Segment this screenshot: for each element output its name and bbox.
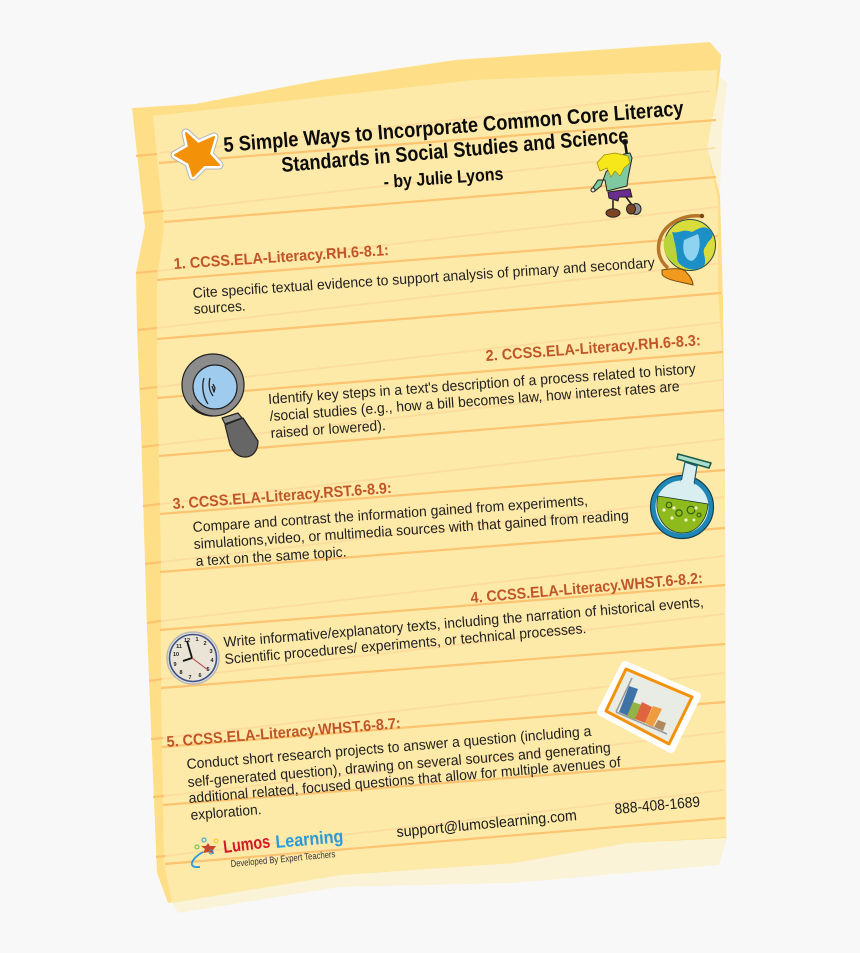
section 3: [172, 480, 629, 570]
logo: Lumos Learning: Learning: [275, 826, 344, 852]
section 5: [166, 715, 622, 824]
section 2: 2. CCSS.ELA-Literacy.RH.6-8.3:: [485, 332, 701, 365]
title: Standards in Social Studies and Science: [280, 124, 629, 177]
icon: magnifying glass: [182, 354, 258, 457]
title: [223, 97, 685, 192]
section 1: [173, 242, 656, 318]
section 4: [223, 570, 704, 668]
icon: flask: [650, 454, 714, 538]
paper: pale under sheet: [165, 73, 727, 913]
icon: wall clock: 12: [184, 638, 190, 644]
section 5: 5. CCSS.ELA-Literacy.WHST.6-8.7:: [166, 715, 401, 751]
title: 5 Simple Ways to Incorporate Common Core Literacy: [223, 97, 685, 157]
icon: wall clock: 2: [203, 641, 207, 647]
icon: wall clock: 9: [173, 662, 177, 668]
section 2: /social studies (e.g., how a bill becomes law, how interest rates are: [269, 379, 680, 425]
section 2: Identify key steps in a text's description of a process related to history: [268, 361, 697, 408]
section 5: exploration.: [190, 802, 262, 824]
logo: Lumos Learning: [192, 826, 344, 870]
section 1: sources.: [193, 299, 246, 318]
icon: globe: [658, 214, 716, 285]
icon: orange star: [175, 133, 219, 176]
paper: back sheet: [132, 42, 726, 903]
section 4: Write informative/explanatory texts, including the narration of historical events,: [223, 595, 704, 651]
icon: wall clock: 7: [188, 675, 192, 681]
logo: Lumos Learning: Developed By Expert Teachers: [230, 849, 336, 870]
section 3: a text on the same topic.: [195, 545, 347, 570]
icon: climbing kid: [591, 140, 641, 217]
chart bars: [616, 678, 667, 734]
icon: wall clock: 10: [173, 652, 179, 658]
section 5: self-generated question), drawing on several sources and generating: [187, 740, 611, 791]
icon: wall clock: 3: [209, 649, 213, 655]
section 3: simulations,video, or multimedia sources with that gained from reading: [193, 508, 629, 553]
section 2: [268, 332, 701, 442]
section 5: additional related, focused questions that allow for multiple avenues of: [188, 755, 622, 807]
icon: wall clock: 4: [210, 658, 214, 664]
section 3: Compare and contrast the information gained from experiments,: [192, 493, 588, 536]
title: - by Julie Lyons: [383, 164, 504, 192]
icon: wall clock: 6: [198, 673, 202, 679]
icon: wall clock: 5: [206, 667, 210, 673]
section 2: raised or lowered).: [270, 418, 386, 442]
section 4: 4. CCSS.ELA-Literacy.WHST.6-8.2:: [470, 570, 703, 607]
section 1: Cite specific textual evidence to support analysis of primary and secondary: [192, 255, 656, 302]
contact: email: support@lumoslearning.com: [396, 807, 578, 841]
icon: bar chart card: [601, 665, 697, 749]
icon: wall clock: 11: [176, 644, 182, 650]
section 1: 1. CCSS.ELA-Literacy.RH.6-8.1:: [173, 242, 389, 273]
icon: wall clock: [167, 632, 219, 684]
section 5: Conduct short research projects to answer a question (including a: [186, 724, 593, 773]
section 4: Scientific procedures/ experiments, or technical processes.: [224, 621, 587, 668]
icon: wall clock: 8: [179, 670, 183, 676]
section 3: 3. CCSS.ELA-Literacy.RST.6-8.9:: [172, 480, 392, 513]
contact: phone: 888-408-1689: [614, 794, 701, 818]
icon: wall clock: 1: [195, 637, 199, 643]
paper: front sheet: [153, 70, 726, 903]
logo: Lumos Learning: Lumos: [222, 831, 271, 857]
